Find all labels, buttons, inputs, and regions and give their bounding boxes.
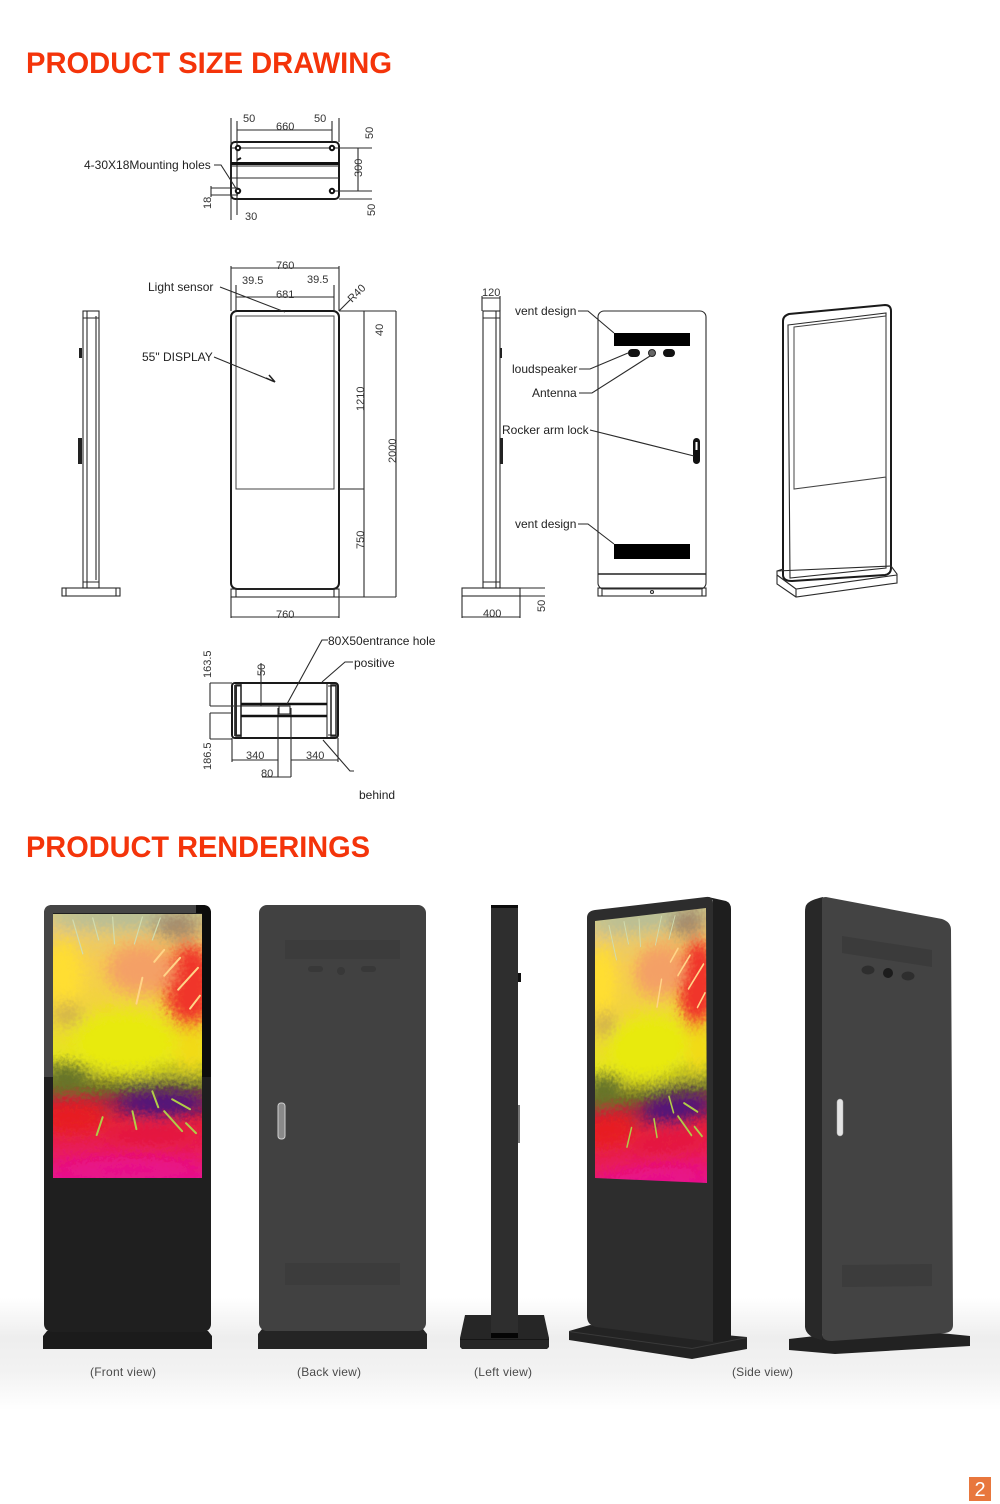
label: loudspeaker: loudspeaker [512, 362, 577, 376]
side button [518, 973, 521, 982]
dimension: 1210: 1210 [355, 387, 367, 411]
drawing: wall mount plate [84, 113, 378, 223]
dimension: 40: 40 [374, 324, 386, 336]
drawing: bottom plan view [202, 634, 436, 802]
drawing: perspective view [777, 305, 897, 597]
drawing: front elevation [142, 260, 399, 621]
label: display: 55" DISPLAY [142, 350, 213, 364]
label: vent design top: vent design [515, 304, 576, 318]
dimension: 50 bottom: 50 [366, 204, 378, 216]
dimension: 50: 50 [536, 600, 548, 612]
drawing: left elevation [62, 311, 120, 596]
dimension: 30: 30 [245, 211, 257, 223]
door handle [837, 1099, 843, 1136]
page number badge [969, 1477, 991, 1501]
dimension: R40: R40 [346, 282, 368, 305]
stand base [789, 1332, 970, 1354]
dimension: 50 left: 50 [243, 113, 255, 125]
label: behind: behind [359, 788, 395, 802]
dimension: 400: 400 [483, 608, 501, 620]
label: entrance hole: 80X50entrance hole [328, 634, 436, 648]
top vent [842, 936, 932, 967]
bottom vent [285, 1263, 400, 1285]
dimension: 340 left: 340 [246, 750, 264, 762]
speakers and antenna [308, 966, 376, 975]
rendering: front view [35, 905, 216, 1379]
dimension: 340 right: 340 [306, 750, 324, 762]
drawing: back elevation [502, 304, 706, 596]
caption: front view: (Front view) [90, 1365, 156, 1379]
label: mounting holes: 4-30X18Mounting holes [84, 158, 211, 172]
stand base [460, 1315, 549, 1349]
label: antenna: Antenna [532, 386, 577, 400]
dimension: 18: 18 [202, 197, 214, 209]
dimension: 750: 750 [355, 531, 367, 549]
page number badge: 2 [974, 1479, 986, 1501]
icon: rocker arm lock [693, 438, 700, 464]
rendering: side view back [789, 897, 970, 1354]
screen [595, 908, 707, 1183]
door handle [278, 1103, 285, 1139]
icon: speaker right [663, 349, 675, 357]
dimension: 39.5 left: 39.5 [242, 275, 263, 287]
heading: product renderings: PRODUCT RENDERINGS [26, 831, 370, 864]
dimension: 50 right: 50 [314, 113, 326, 125]
dimension: 163.5: 163.5 [202, 650, 214, 678]
label: rocker arm lock: Rocker arm lock [502, 423, 590, 437]
dimension: 186.5: 186.5 [202, 742, 214, 770]
dimension: 2000: 2000 [387, 439, 399, 463]
dimension: 80: 80 [261, 768, 273, 780]
dimension: 760 top: 760 [276, 260, 294, 272]
caption: left view: (Left view) [474, 1365, 532, 1379]
icon: top vent [614, 333, 690, 346]
stand base [569, 1325, 747, 1359]
rendering: side view front [569, 897, 793, 1379]
dimension: 120: 120 [482, 287, 500, 299]
dimension: 681: 681 [276, 289, 294, 301]
dimension: 300: 300 [353, 159, 365, 177]
dimension: 760 bottom: 760 [276, 609, 294, 621]
label: vent design bottom: vent design [515, 517, 576, 531]
caption: back view: (Back view) [297, 1365, 361, 1379]
screen [35, 906, 216, 1186]
rendering: back view [258, 905, 427, 1379]
speakers and antenna [862, 966, 914, 980]
bottom vent [842, 1264, 932, 1287]
icon: antenna [648, 350, 656, 356]
rendering: left view [460, 905, 549, 1379]
top vent [285, 940, 400, 959]
dimension: 50 top: 50 [364, 127, 376, 139]
floor shadow [0, 1298, 1000, 1410]
side handle [518, 1105, 520, 1143]
stand base [258, 1329, 427, 1349]
label: positive: positive [354, 656, 395, 670]
label: light sensor: Light sensor [148, 280, 213, 294]
icon: bottom vent [614, 544, 690, 559]
stand base [43, 1331, 212, 1349]
drawing: right elevation [462, 287, 548, 620]
dimension: 39.5 right: 39.5 [307, 274, 328, 286]
icon: speaker left [628, 349, 640, 357]
dimension: 660: 660 [276, 121, 294, 133]
heading: product size drawing: PRODUCT SIZE DRAWING [26, 47, 392, 80]
caption: side view: (Side view) [732, 1365, 793, 1379]
dimension: 50: 50 [256, 664, 268, 676]
